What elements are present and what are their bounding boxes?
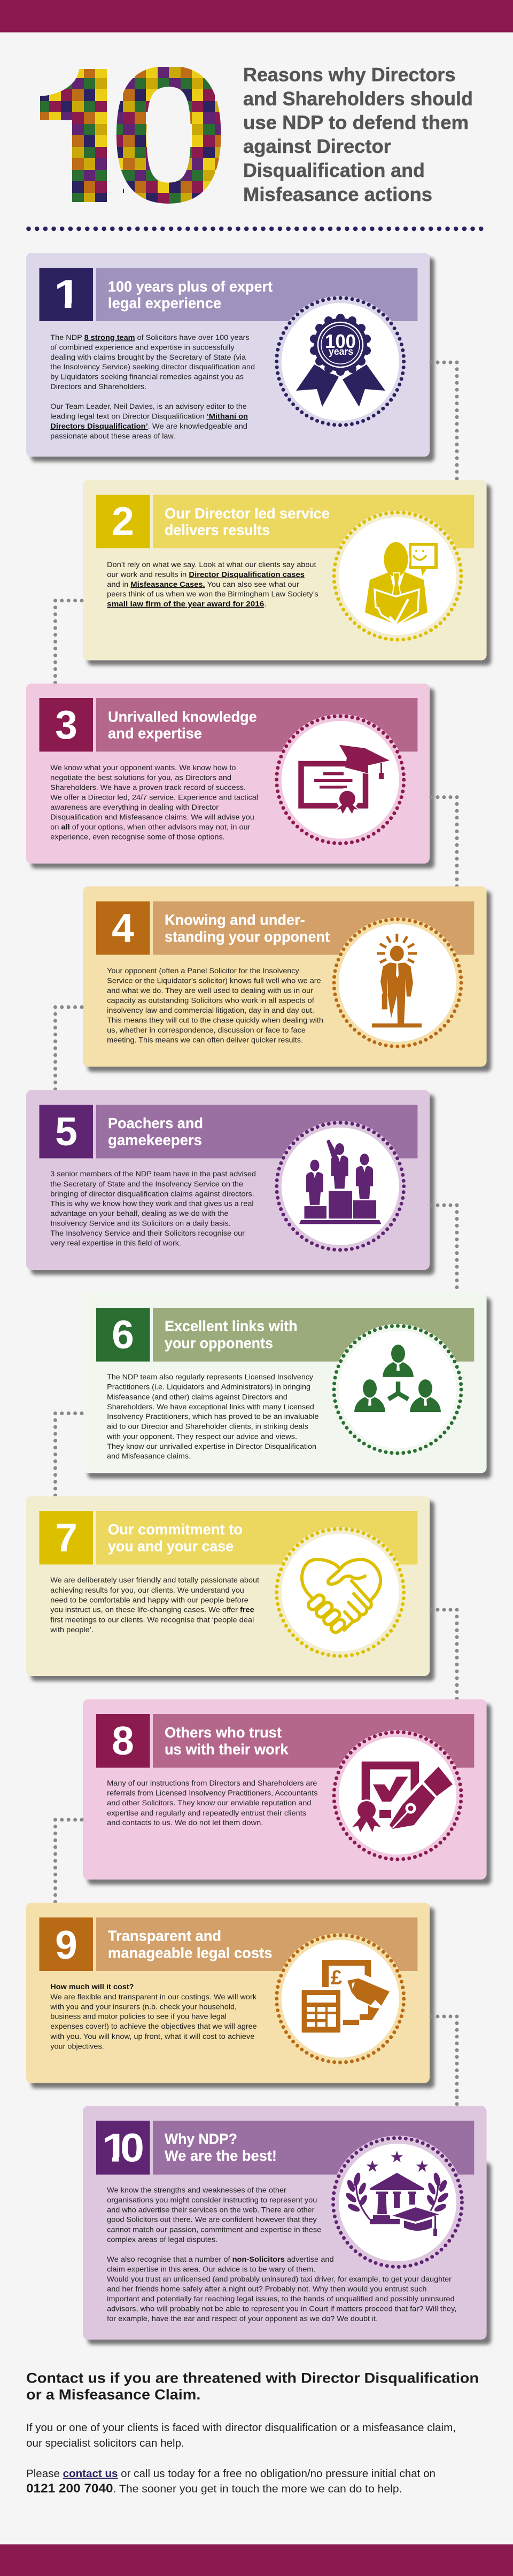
contact paragraph: If you or one of your clients is faced with director disqualification or a misfeasance claim, bbox=[26, 2422, 456, 2434]
connector dots 6 to 7 bbox=[56, 1413, 82, 1497]
body text: Directors Disqualification’ . We are knowledgeable and bbox=[50, 422, 247, 431]
panel: reason 5 bbox=[26, 1090, 434, 1275]
heading bar: Our Director led service bbox=[165, 505, 330, 522]
number 1 bbox=[40, 268, 93, 321]
body text bbox=[50, 1170, 256, 1248]
contact heading: Contact us if you are threatened with Director Disqualification bbox=[26, 2370, 479, 2386]
panel: reason 2 bbox=[83, 480, 491, 665]
body text: first meetings to our clients. We recognise that ‘people deal bbox=[50, 1616, 254, 1625]
body text: and who advertise their services on the web. There are other bbox=[107, 2206, 315, 2215]
body text: Shareholders. We have a proven track record of success. bbox=[50, 783, 246, 792]
body text bbox=[50, 764, 258, 841]
icon: institution, laurels, stars and cap bbox=[331, 2136, 464, 2269]
contact paragraph: our specialist solicitors can help. bbox=[26, 2438, 184, 2449]
heading bar bbox=[96, 268, 417, 321]
body text: organisations you might consider instructing to represent you bbox=[107, 2196, 317, 2205]
number 4 bbox=[96, 901, 150, 955]
body text: We offer a Director led, 24/7 service. Experience and tactical bbox=[50, 793, 258, 802]
body text: Our Team Leader, Neil Davies, is an advisory editor to the bbox=[50, 402, 247, 411]
body text: Disqualification and Misfeasance claims. We will advise you bbox=[50, 813, 254, 822]
body text: and in Misfeasance Cases. You can also see what our bbox=[107, 580, 299, 589]
body text: by Liquidators seeking financial remedies against you as bbox=[50, 373, 244, 382]
body text: referrals from Licensed Insolvency Practitioners, Accountants bbox=[107, 1789, 318, 1798]
body text: of combined experience and expertise in successfully bbox=[50, 343, 235, 352]
number 3: 3 bbox=[55, 702, 77, 747]
body text: We are deliberately user friendly and totally passionate about bbox=[50, 1576, 259, 1585]
heading bar bbox=[96, 1918, 417, 1971]
body text: Many of our instructions from Directors and Shareholders are bbox=[107, 1779, 317, 1788]
connector dots 1 to 2 bbox=[431, 362, 457, 481]
connector dots 5 to 6 bbox=[431, 1205, 457, 1294]
body text: Practitioners (i.e. Liquidators and Administrators) in bringing bbox=[107, 1383, 310, 1392]
heading bar: We are the best! bbox=[165, 2147, 277, 2164]
title bbox=[243, 64, 473, 205]
body text bbox=[107, 2186, 456, 2323]
title: and Shareholders should bbox=[243, 88, 473, 110]
title: Reasons why Directors bbox=[243, 64, 455, 86]
icon: handshake heart bbox=[275, 1527, 406, 1658]
body text: This means they will cut to the chase quickly when dealing with bbox=[107, 1017, 323, 1025]
body text: advisors, who will probably not be able to represent you in Court if matters proceed that far? Will they, bbox=[107, 2305, 456, 2313]
body text: Shareholders. We have exceptional links with many Licensed bbox=[107, 1403, 314, 1411]
call to action: 0121 200 7040 . The sooner you get in touch the more we can do to help. bbox=[26, 2481, 402, 2495]
body text: Don’t rely on what we say. Look at what our clients say about bbox=[107, 561, 316, 569]
body text: The Insolvency Service and their Solicitors recognise our bbox=[50, 1229, 245, 1238]
body text: leading legal text on Director Disqualification ‘Mithani on bbox=[50, 413, 248, 421]
body text: Your opponent (often a Panel Solicitor for the Insolvency bbox=[107, 967, 300, 975]
panel: reason 9 bbox=[26, 1903, 434, 2088]
connector dots 7 to 8 bbox=[431, 1610, 457, 1700]
number 10: 0 bbox=[120, 2125, 144, 2170]
panel: reason 10 bbox=[83, 2106, 491, 2345]
body text bbox=[107, 1779, 318, 1827]
body text: Insolvency Service and its Solicitors on a daily basis. bbox=[50, 1220, 231, 1228]
body text: expenses cover!) to achieve the objectives that we will agree bbox=[50, 2022, 257, 2031]
body text: with you and your insurers (n.b. check your household, bbox=[50, 2003, 237, 2011]
body text bbox=[50, 333, 255, 441]
body text: and other Solicitors. They know our enviable reputation and bbox=[107, 1799, 311, 1807]
body text: small law firm of the year award for 2016 . bbox=[107, 600, 266, 609]
title: use NDP to defend them bbox=[243, 112, 469, 134]
mosaic number 10 bbox=[40, 67, 222, 204]
call to action: Please contact us or call us today for a free no obligation/no pressure initial chat on bbox=[26, 2468, 436, 2480]
number 9 bbox=[40, 1918, 93, 1971]
number 10 bbox=[96, 2121, 150, 2175]
body text: Misfeasance (and other) claims against Directors and bbox=[107, 1393, 287, 1401]
dotted divider bbox=[29, 227, 484, 231]
heading bar bbox=[96, 698, 417, 751]
title: Misfeasance actions bbox=[243, 183, 432, 205]
heading bar bbox=[153, 2121, 474, 2175]
body text: cannot match our passion, commitment and expertise in these bbox=[107, 2225, 321, 2234]
body text: on all of your options, when other advisors may not, in our bbox=[50, 823, 251, 832]
heading bar: Excellent links with bbox=[165, 1317, 298, 1334]
icon: director with book and speech bubble bbox=[332, 511, 463, 641]
number 4: 4 bbox=[112, 905, 134, 950]
heading bar bbox=[96, 1105, 417, 1158]
body text: need to be comfortable and happy with our people before bbox=[50, 1596, 248, 1604]
number 8: 8 bbox=[112, 1718, 134, 1763]
heading bar: Poachers and bbox=[108, 1115, 203, 1131]
body text bbox=[107, 561, 318, 609]
heading bar: Unrivalled knowledge bbox=[108, 708, 257, 725]
contact heading bbox=[26, 2370, 479, 2402]
number 7: 7 bbox=[55, 1515, 77, 1560]
body text: 3 senior members of the NDP team have in the past advised bbox=[50, 1170, 256, 1178]
icon: certificate and graduation cap bbox=[275, 714, 406, 845]
body text: with you. You will know, up front, what it will cost to achieve bbox=[50, 2032, 255, 2041]
body text bbox=[106, 1373, 319, 1461]
panel: reason 3 bbox=[26, 684, 434, 868]
panel: reason 1 bbox=[26, 253, 434, 462]
heading bar: legal experience bbox=[108, 295, 221, 311]
heading bar bbox=[153, 495, 474, 548]
heading bar: us with their work bbox=[165, 1741, 289, 1757]
number 3 bbox=[40, 698, 93, 751]
body text: aid to our Director and Shareholder clients, in striking deals bbox=[107, 1423, 308, 1431]
body text bbox=[50, 1983, 257, 2051]
heading bar: and expertise bbox=[108, 725, 202, 741]
body text: and Misfeasance claims. bbox=[107, 1452, 191, 1461]
body text: our work and results in Director Disqualification cases bbox=[107, 570, 305, 579]
connector dots 9 to 10 bbox=[431, 2016, 457, 2107]
body text: the Insolvency Service) seeking director disqualification and bbox=[50, 363, 255, 371]
heading bar: Knowing and under- bbox=[165, 911, 305, 928]
panel: reason 8 bbox=[83, 1700, 491, 1884]
heading bar bbox=[153, 1308, 474, 1362]
heading bar bbox=[153, 1714, 474, 1768]
number 2: 2 bbox=[112, 499, 134, 544]
heading bar: gamekeepers bbox=[108, 1131, 202, 1148]
icon: 100 years rosette: years bbox=[329, 346, 353, 358]
body text: Directors and Shareholders. bbox=[50, 383, 146, 391]
heading bar: Why NDP? bbox=[165, 2131, 237, 2147]
heading bar: Transparent and bbox=[108, 1928, 221, 1944]
body text: expertise and regularly and repeatedly entrust their clients bbox=[107, 1809, 306, 1818]
body text bbox=[50, 1576, 259, 1634]
call to action bbox=[26, 2468, 436, 2495]
heading bar: 100 years plus of expert bbox=[108, 278, 273, 295]
icon: calculator, pound document and pencil: £ bbox=[331, 1967, 342, 1989]
heading bar bbox=[96, 1511, 417, 1564]
body text: negotiate the best solutions for you, as Directors and bbox=[50, 774, 231, 782]
top banner bbox=[0, 0, 513, 32]
body text: the Secretary of State and the Insolvency Service on the bbox=[50, 1180, 243, 1189]
body text: your objectives. bbox=[50, 2043, 104, 2051]
body text: important and potentially far reaching legal issues, to the hands of unqualified and possibly uninsured bbox=[107, 2295, 455, 2303]
body text: passionate about these areas of law. bbox=[50, 432, 175, 441]
icon: linked people network bbox=[332, 1324, 463, 1455]
body text: complex areas of legal disputes. bbox=[107, 2236, 217, 2244]
connector dots 8 to 9 bbox=[56, 1820, 82, 1904]
number 2 bbox=[96, 495, 150, 548]
heading bar: standing your opponent bbox=[165, 928, 330, 945]
body text: claim expertise in this area. Our advice is to be wary of them. bbox=[107, 2265, 315, 2274]
number 7 bbox=[40, 1511, 93, 1564]
body text: bringing of director disqualification claims against directors. bbox=[50, 1190, 254, 1198]
body text: The NDP 8 strong team of Solicitors have over 100 years bbox=[50, 333, 250, 342]
body text: achieving results for you, our clients. We understand you bbox=[50, 1586, 244, 1595]
body text: We know what your opponent wants. We know how to bbox=[50, 764, 236, 772]
body text: and her friends home safely after a night out? Probably not. Why then would you entrust such bbox=[107, 2285, 426, 2294]
contact heading: or a Misfeasance Claim. bbox=[26, 2386, 200, 2402]
title: Disqualification and bbox=[243, 159, 425, 181]
icon: podium with three figures bbox=[275, 1121, 406, 1252]
icon: 100 years rosette bbox=[275, 296, 406, 427]
heading bar bbox=[153, 901, 474, 955]
bottom banner bbox=[0, 2544, 513, 2576]
number 5 bbox=[40, 1105, 93, 1158]
number 1: 1 bbox=[54, 271, 81, 316]
connector dots 3 to 4 bbox=[431, 797, 457, 887]
number 9: 9 bbox=[55, 1922, 77, 1967]
body text: very real expertise in this field of work. bbox=[50, 1239, 181, 1248]
icon: man with bright idea bbox=[332, 917, 463, 1049]
heading bar: delivers results bbox=[165, 522, 270, 538]
icon: calculator, pound document and pencil bbox=[275, 1934, 406, 2064]
panel: reason 7 bbox=[26, 1496, 434, 1681]
title: against Director bbox=[243, 135, 391, 157]
body text: us, whether in correspondence, discussion or face to face bbox=[107, 1026, 306, 1035]
body text: awareness are everything in dealing with Director bbox=[50, 803, 219, 812]
number 6: 6 bbox=[112, 1312, 134, 1357]
panel: reason 6 bbox=[83, 1293, 491, 1478]
body text: and contacts to us. We do not let them down. bbox=[107, 1819, 263, 1827]
body text: with people’. bbox=[50, 1626, 94, 1634]
body text: and what we do. They are well used to dealing with us in our bbox=[107, 987, 313, 995]
body text: We also recognise that a number of non-Solicitors advertise and bbox=[107, 2255, 334, 2264]
connector dots 2 to 3 bbox=[56, 601, 82, 685]
number 6 bbox=[96, 1308, 150, 1362]
body text: dealing with claims brought by the Secretary of State (via bbox=[50, 353, 246, 362]
contact section bbox=[26, 2370, 479, 2495]
body text: experience, even recognise some of those options. bbox=[50, 833, 225, 841]
heading bar: your opponents bbox=[165, 1335, 273, 1351]
body text: This is why we know how they work and that gives us a real bbox=[50, 1200, 254, 1208]
body text: meeting. This means we can often deliver quicker results. bbox=[107, 1036, 303, 1044]
body text: The NDP team also regularly represents Licensed Insolvency bbox=[107, 1373, 314, 1382]
body text: Would you trust an unlicensed (and probably uninsured) taxi driver, for example, to get your daughter bbox=[107, 2275, 452, 2284]
number 10: 1 bbox=[102, 2125, 128, 2170]
body text: you instruct us, on these life-changing cases. We offer free bbox=[50, 1606, 254, 1615]
body text: advantage on your behalf, dealing as we do with the bbox=[50, 1209, 228, 1218]
body text: for example, have the ear and respect of your opponent as we do? We doubt it. bbox=[107, 2315, 378, 2323]
body text: good Solicitors out there. We are confident however that they bbox=[107, 2216, 317, 2224]
body text: insolvency law and commercial litigation, day in and day out. bbox=[107, 1006, 314, 1015]
heading bar: Others who trust bbox=[165, 1724, 282, 1741]
body text: with your opponent. They respect our advice and views. bbox=[106, 1432, 297, 1441]
heading bar: Our commitment to bbox=[108, 1521, 243, 1538]
connector dots 4 to 5 bbox=[56, 1007, 82, 1091]
panel: reason 4 bbox=[83, 886, 491, 1072]
contact paragraph bbox=[26, 2422, 456, 2449]
number 5: 5 bbox=[55, 1109, 77, 1154]
body text: peers think of us when we won the Birmingham Law Society’s bbox=[107, 590, 318, 599]
heading bar: manageable legal costs bbox=[108, 1944, 273, 1961]
body text: Service or the Liquidator’s solicitor) knows full well who we are bbox=[107, 977, 321, 986]
icon: 100 years rosette: 100 bbox=[325, 330, 356, 352]
body text: They know our unrivalled expertise in Director Disqualification bbox=[107, 1442, 316, 1451]
heading bar: you and your case bbox=[108, 1538, 234, 1554]
icon: ticked certificate and fountain pen bbox=[332, 1731, 463, 1861]
body text bbox=[107, 967, 323, 1044]
body text: business and motor policies to see if you have legal bbox=[50, 2013, 227, 2021]
body text: We know the strengths and weaknesses of the other bbox=[107, 2186, 286, 2194]
body text: capacity as outstanding Solicitors who work in all aspects of bbox=[107, 996, 314, 1005]
body text: How much will it cost? bbox=[50, 1983, 134, 1991]
body text: Insolvency Practitioners, which has proved to be an invaluable bbox=[107, 1413, 319, 1421]
body text: We are flexible and transparent in our costings. We will work bbox=[50, 1993, 257, 2001]
number 8 bbox=[96, 1714, 150, 1768]
